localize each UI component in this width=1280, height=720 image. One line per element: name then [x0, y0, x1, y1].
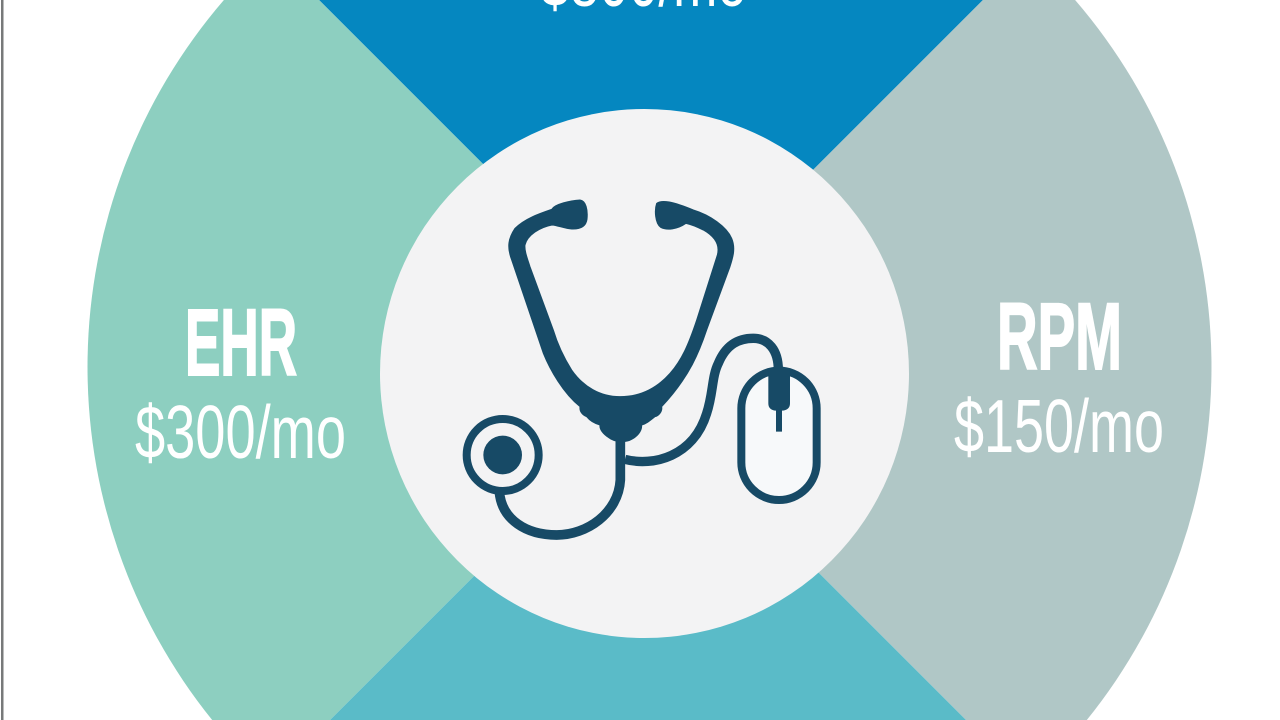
mouse connector [768, 368, 790, 432]
page edge line [1, 0, 4, 720]
mouse cable [625, 338, 778, 462]
wedge: bottom service [330, 402, 966, 720]
wedge: RPM [648, 0, 1211, 720]
EHR label: EHR [185, 290, 297, 396]
wedge: EHR [88, 0, 651, 720]
RPM label: RPM [997, 284, 1122, 390]
chest piece center [483, 436, 522, 474]
stethoscope headset [509, 200, 734, 442]
icon: stethoscope with computer mouse [467, 200, 817, 535]
mouse body [741, 371, 817, 500]
EHR price: $300/mo [135, 390, 346, 474]
center circle [380, 109, 909, 638]
stethoscope tube to chest piece [499, 440, 620, 535]
chest piece ring [467, 419, 539, 491]
wedge: top service [319, 0, 983, 332]
RPM price: $150/mo [954, 384, 1164, 468]
